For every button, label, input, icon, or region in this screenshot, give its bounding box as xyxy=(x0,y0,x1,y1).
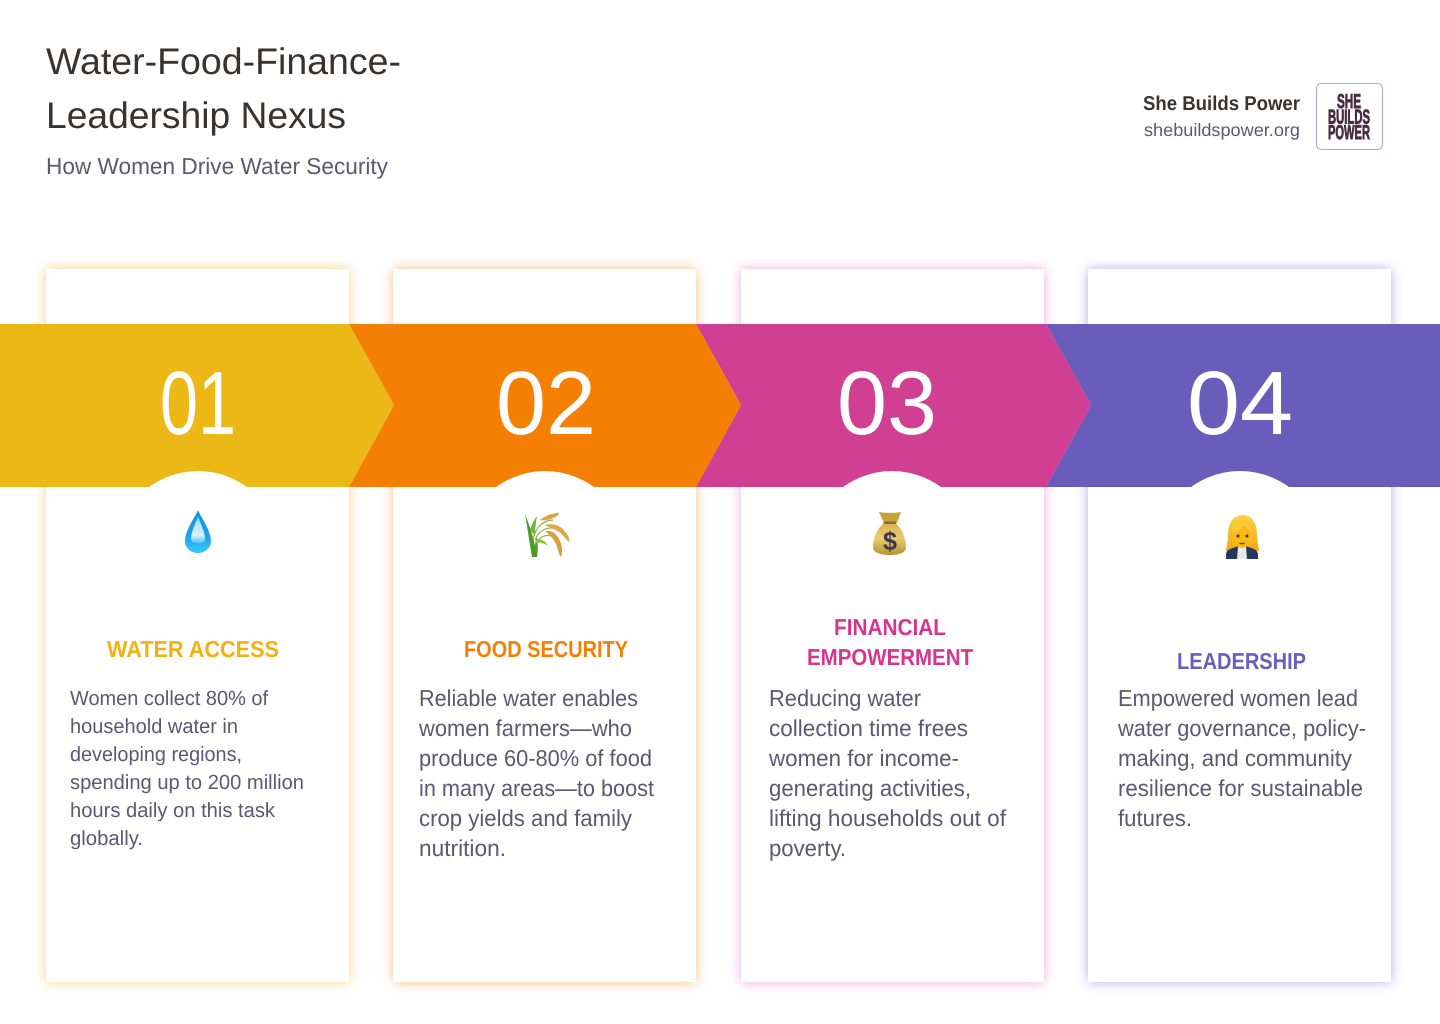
body text: Reliable water enables xyxy=(419,685,638,711)
chevron 01 xyxy=(0,324,394,487)
panel: 04 leadership xyxy=(1046,269,1440,982)
body text: in many areas—to boost xyxy=(419,775,655,801)
heading: financial empowerment: EMPOWERMENT xyxy=(807,644,973,670)
chevron 03 xyxy=(696,324,1091,487)
logo: BUILDS xyxy=(1328,106,1370,128)
body text: developing regions, xyxy=(70,743,242,766)
body text xyxy=(768,685,1007,861)
body text: nutrition. xyxy=(419,835,506,861)
title: Water-Food-Finance- xyxy=(46,41,401,82)
body text: lifting households out of xyxy=(769,805,1007,831)
panel: 01 water access xyxy=(0,269,394,982)
heading: leadership: LEADERSHIP xyxy=(1177,648,1306,674)
heading: food security: FOOD SECURITY xyxy=(464,636,628,662)
body text xyxy=(1117,685,1366,831)
icon: woman xyxy=(1226,515,1259,559)
body text: Empowered women lead xyxy=(1118,685,1358,711)
heading: water access: WATER ACCESS xyxy=(107,636,279,662)
body text: collection time frees xyxy=(769,715,968,741)
body text: household water in xyxy=(70,715,238,738)
body text: Reducing water xyxy=(769,685,921,711)
brand url: shebuildspower.org xyxy=(1144,120,1300,140)
number 03: 03 xyxy=(837,354,937,454)
body text: resilience for sustainable xyxy=(1118,775,1363,801)
heading: financial empowerment: FINANCIAL xyxy=(834,614,946,640)
chevron 04 xyxy=(1046,324,1440,487)
body text: futures. xyxy=(1118,805,1192,831)
chevron 02 xyxy=(349,324,741,487)
body text: water governance, policy- xyxy=(1117,715,1366,741)
body text: Women collect 80% of xyxy=(70,687,268,710)
icon: water drop xyxy=(185,510,211,553)
panel: 03 financial empowerment xyxy=(696,269,1091,982)
body text: spending up to 200 million xyxy=(70,771,304,794)
body text: poverty. xyxy=(769,835,846,861)
body text: crop yields and family xyxy=(419,805,632,831)
icon: money bag: $ xyxy=(883,526,898,556)
body text: globally. xyxy=(70,827,143,850)
number 02: 02 xyxy=(496,354,596,454)
brand block xyxy=(1143,84,1382,150)
title xyxy=(46,41,401,136)
body text: women farmers—who xyxy=(418,715,632,741)
subtitle: How Women Drive Water Security xyxy=(46,153,388,179)
logo: POWER xyxy=(1328,122,1370,144)
body text xyxy=(70,687,304,850)
logo: SHE xyxy=(1337,91,1361,113)
body text: making, and community xyxy=(1118,745,1352,771)
title: Leadership Nexus xyxy=(46,95,346,136)
body text: women for income- xyxy=(768,745,959,771)
brand name: She Builds Power xyxy=(1143,93,1300,115)
number 01: 01 xyxy=(160,354,236,454)
header: title and subtitle xyxy=(46,41,401,179)
icon: rice xyxy=(525,513,569,557)
heading: financial empowerment xyxy=(807,614,973,670)
body text: produce 60-80% of food xyxy=(419,745,652,771)
body text xyxy=(418,685,655,861)
panel: 02 food security xyxy=(349,269,741,982)
body text: generating activities, xyxy=(769,775,971,801)
number 04: 04 xyxy=(1187,354,1293,454)
body text: hours daily on this task xyxy=(70,799,276,822)
logo xyxy=(1316,84,1382,150)
icon: money bag xyxy=(873,512,906,556)
